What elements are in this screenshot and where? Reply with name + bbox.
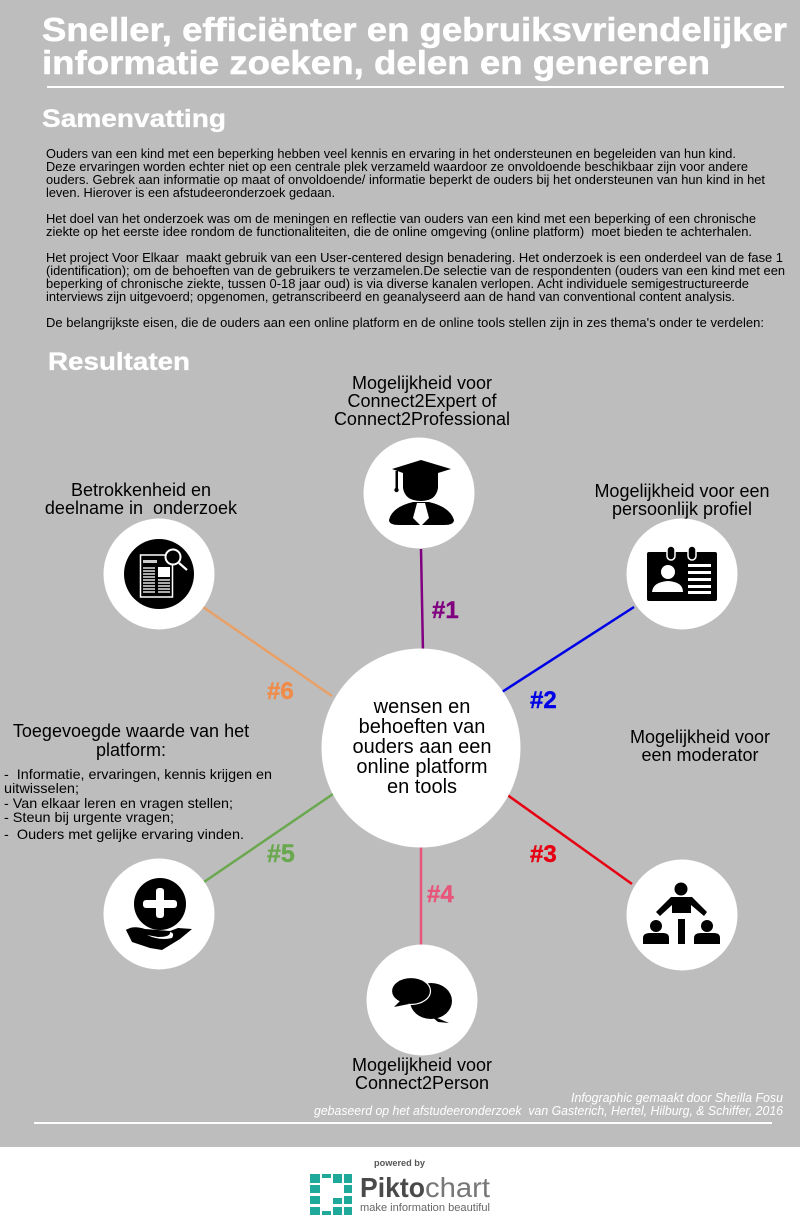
footer: Piktochart logo: chart <box>425 1172 490 1203</box>
theme 5 icon: hand with plus <box>104 858 214 970</box>
theme 5 label <box>4 721 272 842</box>
text block: summary: beperking of chronische ziekte, tussen 0-18 jaar oud) is via diverse kanalen verlopen. Acht individuele semigestructureerde <box>46 277 749 291</box>
connector #1 <box>421 549 423 652</box>
theme 5 label: Toegevoegde waarde van het <box>13 721 249 741</box>
theme 2 label: Mogelijkheid voor een <box>594 481 770 501</box>
theme 6 label <box>45 480 238 518</box>
theme 2 number: #2 <box>530 687 557 714</box>
theme 1 label <box>334 373 510 429</box>
text block: summary: Ouders van een kind met een beperking hebben veel kennis en ervaring in het ondersteunen en begeleiden van hun kind. <box>46 147 736 161</box>
theme 2 label <box>594 481 770 519</box>
theme 1 number: #1 <box>432 597 459 624</box>
theme 5 number: #5 <box>267 840 295 868</box>
theme 1 label: Connect2Expert of <box>347 391 498 411</box>
text block: summary: interviews zijn uitgevoerd; opgenomen, getranscribeerd en geanalyseerd aan de hand van conventional content analysis. <box>46 290 735 304</box>
connector #2 <box>502 607 634 692</box>
text block: summary: leven. Hierover is een afstudeeronderzoek gedaan. <box>46 186 335 200</box>
theme 6 label: deelname in onderzoek <box>45 498 238 518</box>
footer: Piktochart logo: powered by <box>374 1158 426 1169</box>
theme 2 icon: profile card <box>626 518 738 630</box>
text block: summary: Deze ervaringen worden echter niet op een centrale plek verzameld waardoor ze onvoldoende beschikbaar zijn voor andere <box>46 160 748 174</box>
center circle: wishes and needs: behoeften van <box>359 716 485 738</box>
theme 3 label: Mogelijkheid voor <box>630 727 770 747</box>
theme 1 icon: graduate <box>364 438 474 548</box>
theme 4 label: Connect2Person <box>355 1073 489 1093</box>
title: informatie zoeken, delen en genereren <box>42 44 710 81</box>
title: Sneller, efficiënter en gebruiksvriendelijker <box>42 11 787 48</box>
theme 4 label: Mogelijkheid voor <box>352 1055 492 1075</box>
theme 6 label: Betrokkenheid en <box>71 480 211 500</box>
theme 3 label <box>630 727 770 765</box>
center circle: wishes and needs <box>322 648 520 848</box>
theme 2 label: persoonlijk profiel <box>612 499 752 519</box>
center circle: wishes and needs: wensen en <box>373 696 470 718</box>
footer: Piktochart logo: Pikto <box>360 1172 425 1203</box>
theme 5 label: platform: <box>96 740 166 760</box>
theme 4 label <box>352 1055 492 1093</box>
theme 4 number: #4 <box>427 881 454 908</box>
theme 5 label: - Informatie, ervaringen, kennis krijgen en <box>4 766 272 782</box>
center circle: wishes and needs: ouders aan een <box>352 736 492 758</box>
text block: summary: Het project Voor Elkaar maakt gebruik van een User-centered design benadering. Het onderzoek is een onderdeel van de fase 1 <box>46 251 783 265</box>
theme 3 icon: moderator and group <box>626 860 738 970</box>
theme 1 label: Mogelijkheid voor <box>352 373 492 393</box>
credits <box>314 1091 783 1118</box>
footer: Piktochart logo: make information beautiful <box>360 1202 490 1214</box>
connector #5 <box>204 794 333 882</box>
theme 5 label: - Steun bij urgente vragen; <box>4 809 174 825</box>
text block: summary: Het doel van het onderzoek was om de meningen en reflectie van ouders van een kind met een beperking of een chronische <box>46 212 756 226</box>
credits: gebaseerd op het afstudeeronderzoek van Gasterich, Hertel, Hilburg, & Schiffer, 2016 <box>314 1104 783 1118</box>
theme 4 icon: speech bubbles <box>366 944 478 1056</box>
text block: summary: ziekte op het eerste idee rondom de functionaliteiten, die de online omgeving (online platform) moet bieden te achterhalen. <box>46 225 752 239</box>
center circle: wishes and needs: online platform <box>356 756 488 778</box>
credits: Infographic gemaakt door Sheilla Fosu <box>571 1091 783 1105</box>
text block: summary: (identification); om de behoeften van de gebruikers te verzamelen.De selectie van de respondenten (ouders van een kind met een <box>46 264 785 278</box>
connector #3 <box>506 794 632 884</box>
theme 1 label: Connect2Professional <box>334 409 510 429</box>
theme 5 label: - Van elkaar leren en vragen stellen; <box>4 795 233 811</box>
center circle: wishes and needs: en tools <box>387 776 457 798</box>
theme 5 label: - Ouders met gelijke ervaring vinden. <box>4 826 244 842</box>
heading: Resultaten: Resultaten <box>48 348 190 376</box>
text block: summary <box>46 147 785 330</box>
footer: Piktochart logo <box>310 1158 490 1215</box>
connector #6 <box>203 607 332 696</box>
theme 5 label: uitwisselen; <box>4 780 79 796</box>
connector #4 <box>420 842 422 946</box>
heading: Samenvatting: Samenvatting <box>42 105 226 133</box>
title <box>42 11 787 81</box>
theme 6 icon: research newspaper <box>104 518 214 630</box>
theme 3 label: een moderator <box>641 745 759 765</box>
text block: summary: De belangrijkste eisen, die de ouders aan een online platform en de online tools stellen zijn in zes thema's onder te verdelen: <box>46 316 764 330</box>
text block: summary: ouders. Gebrek aan informatie op maat of onvoldoende/ informatie beperkt de ouders bij het ondersteunen van hun kind in het <box>46 173 766 187</box>
theme 3 number: #3 <box>530 841 557 868</box>
theme 6 number: #6 <box>267 678 294 705</box>
